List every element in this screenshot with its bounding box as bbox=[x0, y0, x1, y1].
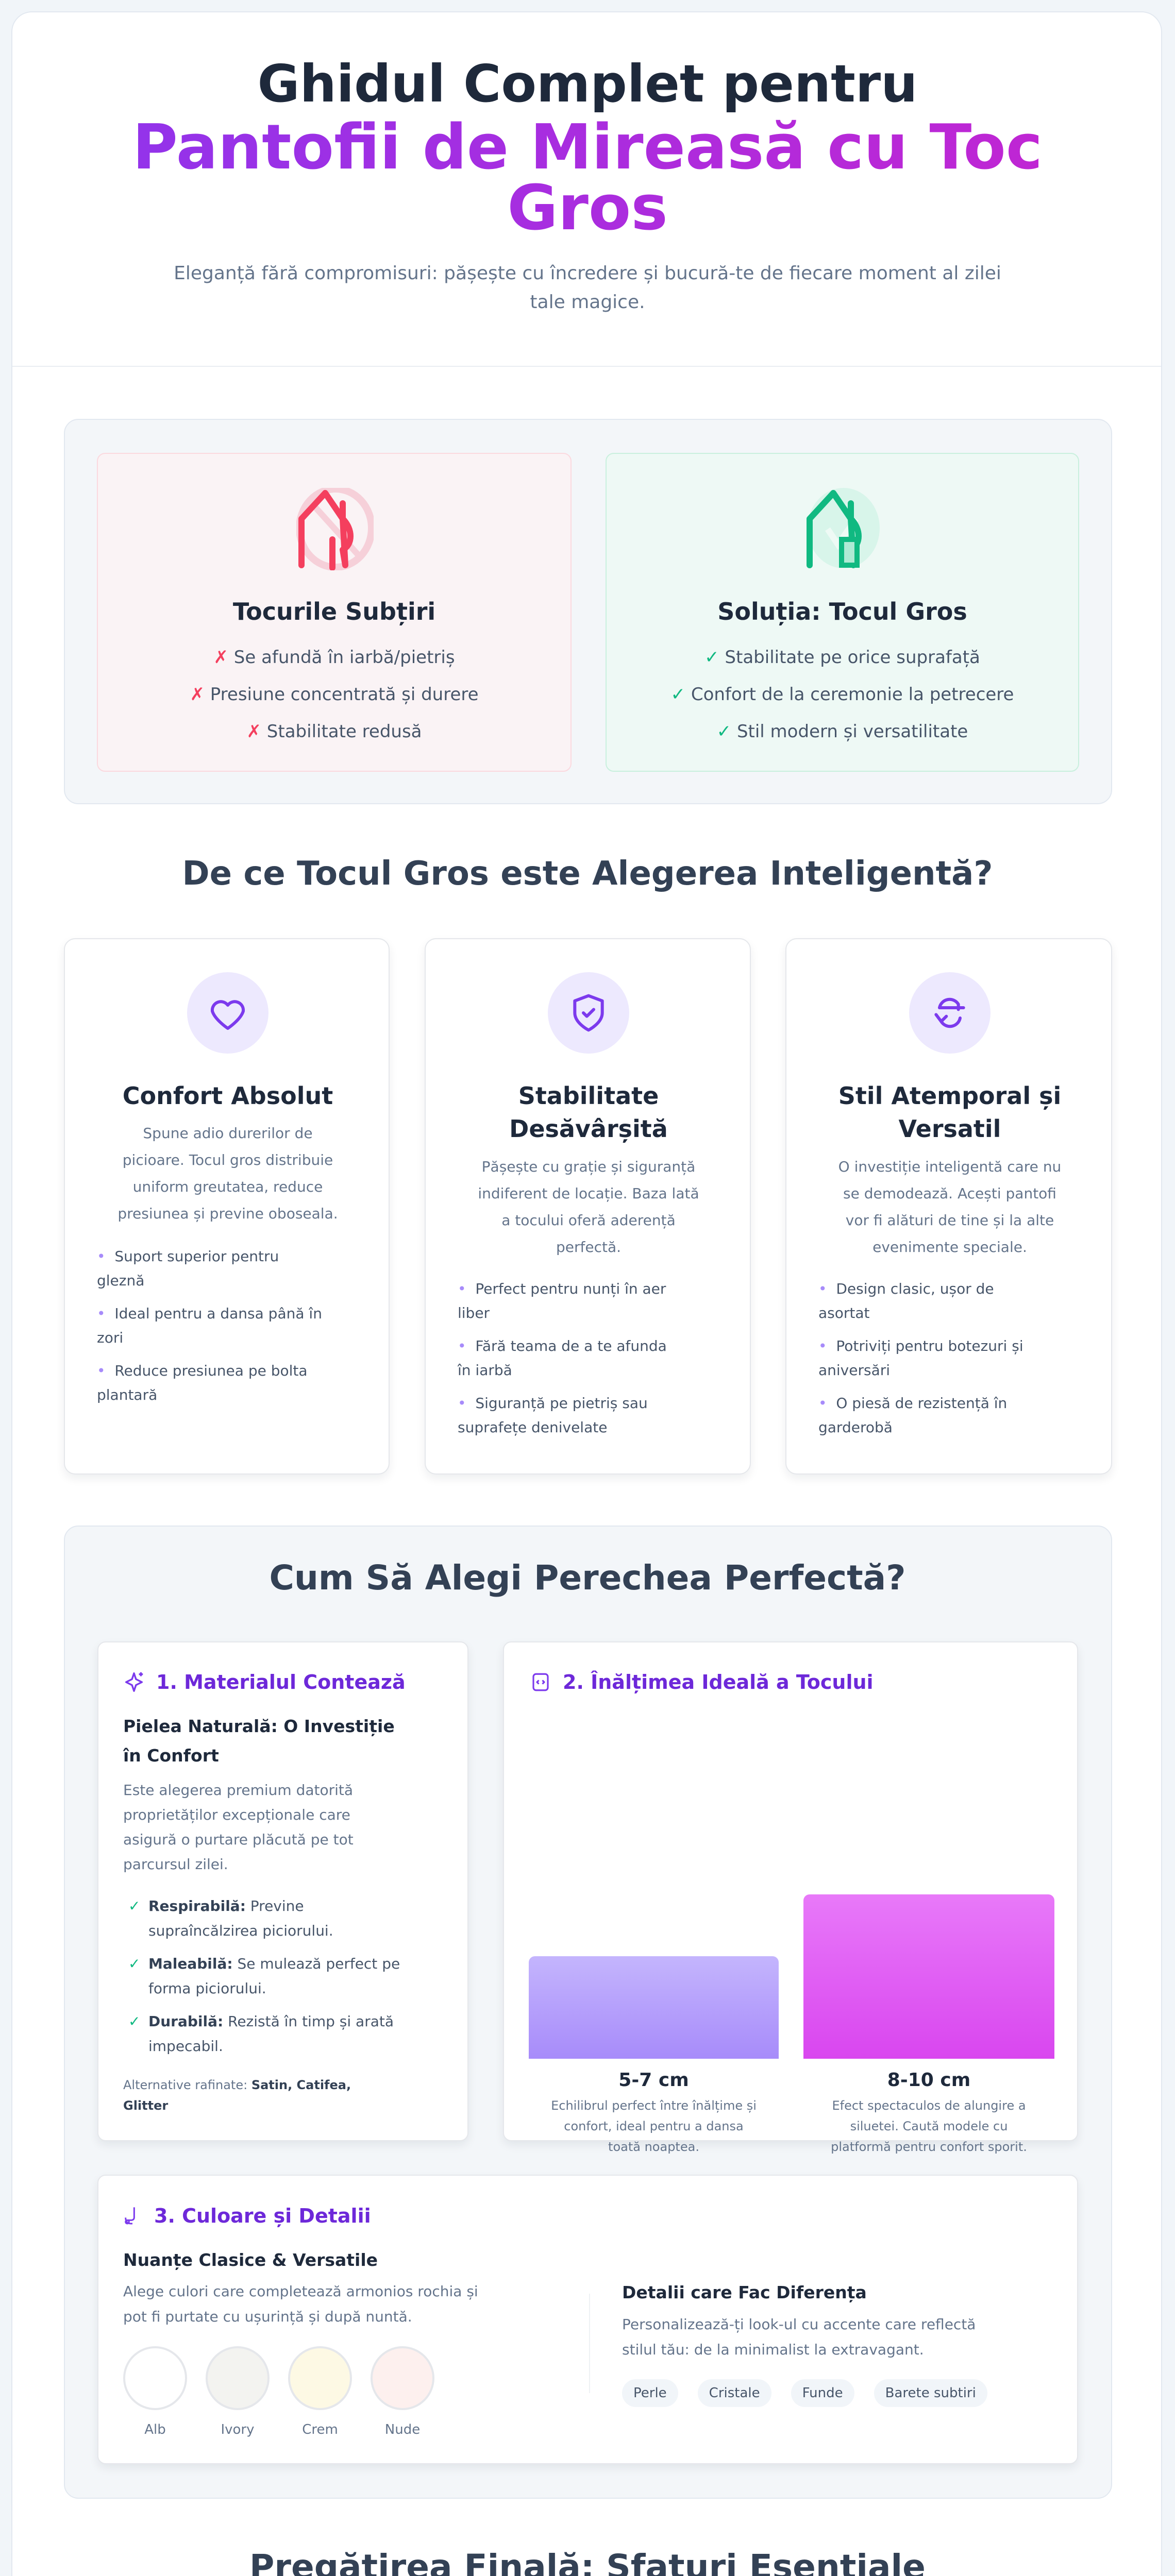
bullets: • Perfect pentru nunți în aer bbox=[458, 1280, 666, 1297]
label: 5-7: confort, ideal pentru a dansa bbox=[564, 2119, 744, 2133]
title: Versatil bbox=[899, 1115, 1001, 1143]
card: thin heels bbox=[97, 453, 572, 772]
desc: asigură o purtare plăcută pe tot bbox=[123, 1831, 354, 1848]
bullets: • Potriviți pentru botezuri și bbox=[818, 1337, 1023, 1354]
panel: comparison bbox=[64, 419, 1112, 804]
title bbox=[838, 1082, 1061, 1143]
heading: how to choose: Cum Să Alegi Perechea Perfectă? bbox=[269, 1558, 906, 1598]
card: comfort bbox=[64, 938, 390, 1475]
list: ✓ Stil modern și versatilitate bbox=[717, 721, 968, 742]
desc: a tocului oferă aderență bbox=[501, 1212, 676, 1229]
heading: 1. Materialul Contează bbox=[156, 1671, 406, 1693]
tags bbox=[622, 2379, 987, 2407]
details block: Personalizează-ți look-ul cu accente care reflectă bbox=[622, 2316, 976, 2333]
icon: refresh bbox=[909, 972, 991, 1054]
checklist: Respirabilă: Previne bbox=[148, 1897, 304, 1914]
list bbox=[671, 647, 1014, 742]
desc bbox=[123, 1782, 354, 1873]
subtitle: Eleganță fără compromisuri: pășește cu încredere și bucură-te de fiecare moment al zilei bbox=[174, 263, 1001, 284]
checklist: forma piciorului. bbox=[148, 1980, 266, 1997]
title: Pantofii de Mireasă cu Toc bbox=[132, 112, 1043, 183]
desc: vor fi alături de tine și la alte bbox=[846, 1212, 1054, 1229]
list: ✗ Stabilitate redusă bbox=[246, 721, 422, 742]
swatches: Alb bbox=[144, 2422, 166, 2437]
bullets: asortat bbox=[818, 1304, 870, 1321]
bullets: în iarbă bbox=[458, 1362, 512, 1379]
label: 5-7 bbox=[551, 2070, 757, 2154]
title bbox=[132, 54, 1043, 244]
tags: Barete subtiri bbox=[885, 2385, 976, 2401]
desc: Pășește cu grație și siguranță bbox=[482, 1158, 695, 1175]
checklist: Maleabilă: Se mulează perfect pe bbox=[148, 1955, 400, 1972]
card: thick heel bbox=[606, 453, 1079, 772]
subtitle bbox=[174, 263, 1001, 313]
details block bbox=[622, 2282, 987, 2407]
desc: indiferent de locație. Baza lată bbox=[478, 1185, 699, 1202]
desc: presiunea și previne oboseala. bbox=[118, 1205, 338, 1222]
desc: O investiție inteligentă care nu bbox=[838, 1158, 1061, 1175]
tags: Cristale bbox=[709, 2385, 760, 2401]
alternatives bbox=[123, 2078, 351, 2113]
desc bbox=[838, 1158, 1061, 1256]
bullets: plantară bbox=[97, 1386, 157, 1403]
bullets: • Reduce presiunea pe bolta bbox=[97, 1362, 308, 1379]
list: ✓ Stabilitate pe orice suprafață bbox=[704, 647, 980, 668]
bullets: • Fără teama de a te afunda bbox=[458, 1337, 667, 1354]
alternatives: Glitter bbox=[123, 2098, 168, 2113]
checklist: ✓ bbox=[128, 1955, 140, 1972]
bullets bbox=[458, 1280, 667, 1436]
title bbox=[509, 1082, 668, 1143]
bullets: • Design clasic, ușor de bbox=[818, 1280, 994, 1297]
bullets: liber bbox=[458, 1304, 490, 1321]
swatches: Crem bbox=[302, 2422, 338, 2437]
label: 8-10: 8-10 cm bbox=[887, 2070, 970, 2091]
title: Confort Absolut bbox=[123, 1082, 333, 1110]
heading: 2. Înălțimea Ideală a Tocului bbox=[563, 1671, 874, 1693]
label: 5-7: toată noaptea. bbox=[608, 2140, 699, 2154]
title: Stil Atemporal și bbox=[838, 1082, 1061, 1110]
desc: se demodează. Acești pantofi bbox=[843, 1185, 1056, 1202]
desc: picioare. Tocul gros distribuie bbox=[123, 1151, 333, 1168]
bullets: aniversări bbox=[818, 1362, 890, 1379]
heading: 3. Culoare și Detalii bbox=[154, 2205, 371, 2227]
subheading bbox=[123, 1716, 395, 1766]
desc: perfectă. bbox=[556, 1239, 621, 1256]
desc bbox=[478, 1158, 699, 1256]
subheading: în Confort bbox=[123, 1745, 219, 1766]
card: style bbox=[785, 938, 1112, 1475]
checklist: ✓ bbox=[128, 2013, 140, 2030]
alternatives: Alternative rafinate: Satin, Catifea, bbox=[123, 2078, 351, 2092]
title: Stabilitate bbox=[518, 1082, 659, 1110]
panel: how to choose bbox=[64, 1526, 1112, 2499]
checklist: supraîncălzirea piciorului. bbox=[148, 1922, 333, 1939]
desc: evenimente speciale. bbox=[872, 1239, 1027, 1256]
desc: uniform greutatea, reduce bbox=[133, 1178, 323, 1195]
swatches bbox=[123, 2346, 434, 2437]
card: material bbox=[97, 1641, 468, 2141]
bullets: garderobă bbox=[818, 1419, 893, 1436]
details block: Detalii care Fac Diferența bbox=[622, 2282, 867, 2302]
subheading: Nuanțe Clasice & Versatile bbox=[123, 2250, 378, 2270]
icon: heart bbox=[187, 972, 268, 1054]
desc: pot fi purtate cu ușurință și după nuntă. bbox=[123, 2308, 412, 2325]
title: Ghidul Complet pentru bbox=[258, 54, 917, 114]
bar: 5-7 cm bbox=[529, 1956, 779, 2059]
checklist: impecabil. bbox=[148, 2038, 223, 2055]
desc bbox=[123, 2283, 478, 2325]
icon: shield bbox=[548, 972, 629, 1054]
desc: Este alegerea premium datorită bbox=[123, 1782, 353, 1799]
bullets: gleznă bbox=[97, 1272, 144, 1289]
tags: Funde bbox=[802, 2385, 843, 2401]
bullets: • Ideal pentru a dansa până în bbox=[97, 1305, 322, 1322]
checklist: Durabilă: Rezistă în timp și arată bbox=[148, 2013, 394, 2030]
bar: 8-10 cm bbox=[803, 1894, 1054, 2059]
subheading: Pielea Naturală: O Investiție bbox=[123, 1716, 395, 1736]
heading: why: De ce Tocul Gros este Alegerea Inteligentă? bbox=[182, 855, 993, 893]
list: ✗ Se afundă în iarbă/pietriș bbox=[213, 647, 455, 668]
label: 5-7: Echilibrul perfect între înălțime și bbox=[551, 2098, 757, 2113]
icon: house check bbox=[807, 488, 880, 568]
card: heel height bbox=[503, 1641, 1078, 2141]
swatches: Ivory bbox=[221, 2422, 255, 2437]
bullets: suprafețe denivelate bbox=[458, 1419, 607, 1436]
list: ✗ Presiune concentrată și durere bbox=[190, 684, 479, 705]
card: stability bbox=[425, 938, 751, 1475]
bar chart bbox=[529, 1894, 1054, 2154]
title: Gros bbox=[507, 173, 668, 244]
tags: Perle bbox=[633, 2385, 667, 2401]
details block: stilul tău: de la minimalist la extravagant. bbox=[622, 2341, 924, 2358]
label: 8-10: platformă pentru confort sporit. bbox=[831, 2140, 1027, 2154]
desc: Alege culori care completează armonios rochia și bbox=[123, 2283, 478, 2300]
label: 8-10: siluetei. Caută modele cu bbox=[850, 2119, 1008, 2133]
bullets bbox=[97, 1248, 322, 1403]
swatches: Nude bbox=[385, 2422, 420, 2437]
label: 8-10 bbox=[831, 2070, 1027, 2154]
list: ✓ Confort de la ceremonie la petrecere bbox=[671, 684, 1014, 705]
card: colour & details bbox=[97, 2175, 1078, 2464]
bullets: • Siguranță pe pietriș sau bbox=[458, 1395, 648, 1412]
label: 8-10: Efect spectaculos de alungire a bbox=[832, 2098, 1026, 2113]
checklist bbox=[128, 1897, 400, 2055]
list bbox=[190, 647, 479, 742]
bullets: zori bbox=[97, 1329, 123, 1346]
heading: Soluția: Tocul Gros bbox=[717, 598, 967, 625]
checklist: ✓ bbox=[128, 1897, 140, 1914]
bullets: • Suport superior pentru bbox=[97, 1248, 279, 1265]
title: Desăvârșită bbox=[509, 1115, 668, 1143]
desc: proprietăților excepționale care bbox=[123, 1806, 350, 1823]
desc: Spune adio durerilor de bbox=[143, 1125, 313, 1142]
subtitle: tale magice. bbox=[530, 292, 645, 313]
icon: house crossed bbox=[296, 488, 374, 570]
heading: Tocurile Subțiri bbox=[233, 598, 435, 625]
label: 5-7: 5-7 cm bbox=[618, 2070, 689, 2091]
desc bbox=[118, 1125, 338, 1222]
bullets bbox=[818, 1280, 1023, 1436]
bullets: • O piesă de rezistență în bbox=[818, 1395, 1007, 1412]
desc: parcursul zilei. bbox=[123, 1856, 228, 1873]
